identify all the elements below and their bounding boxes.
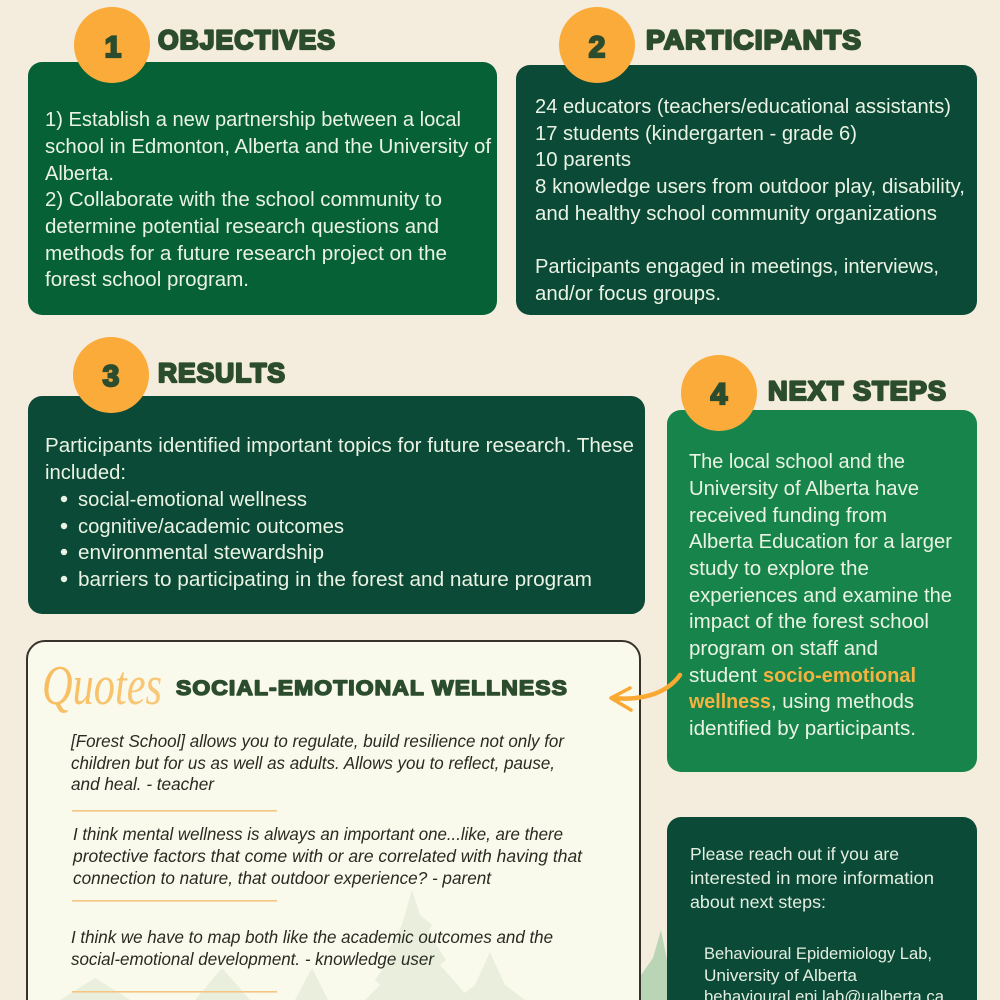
contact text: Behavioural Epidemiology Lab, [704,945,932,963]
results text: Participants identified important topics for future research. These [45,435,634,457]
quote: parent: protective factors that come with or are correlated with having that [72,846,583,866]
results text: environmental stewardship [78,542,324,564]
icon: tree beside quotes panel [641,930,667,1000]
icon: number 3 badge [73,337,149,413]
next steps text: University of Alberta have [689,478,919,500]
heading: next steps: NEXT STEPS [768,376,947,406]
icon: number 3 badge: 3 [103,360,119,393]
quote: parent: I think mental wellness is always an important one...like, are there [73,824,563,844]
heading: results: RESULTS [158,358,286,388]
objectives text: 1) Establish a new partnership between a local [45,109,461,131]
quote: knowledge user: social-emotional development. - knowledge user [71,949,435,969]
quote: parent: connection to nature, that outdoor experience? - parent [73,868,492,888]
panel: results [28,396,645,614]
quote: knowledge user [71,927,553,969]
quote: teacher [70,731,565,794]
results text: barriers to participating in the forest and nature program [78,569,592,591]
objectives text: methods for a future research project on the [45,243,447,265]
quote: knowledge user: I think we have to map both like the academic outcomes and the [71,927,553,947]
heading: objectives: OBJECTIVES [158,25,336,55]
next steps text: , using methods [771,691,914,713]
objectives text: determine potential research questions and [45,216,439,238]
objectives text: forest school program. [45,269,249,291]
contact text: interested in more information [690,868,934,888]
next steps text: The local school and the [689,451,905,473]
next steps text: socio-emotional [763,665,916,687]
participants text: Participants engaged in meetings, interviews, [535,256,939,278]
participants text: and healthy school community organizations [535,203,937,225]
panel: quotes [27,641,640,1000]
quote: teacher: [Forest School] allows you to regulate, build resilience not only for [70,731,565,751]
icon: number 1 badge: 1 [105,31,121,64]
icon: number 2 badge: 2 [589,31,605,64]
participants text: and/or focus groups. [535,283,721,305]
next steps text: student [689,665,757,687]
next steps text: study to explore the [689,558,869,580]
heading: social-emotional wellness: SOCIAL-EMOTIONAL WELLNESS [176,677,568,700]
contact text: Please reach out if you are [690,844,899,864]
contact text: University of Alberta [704,967,858,985]
participants text: 8 knowledge users from outdoor play, disability, [535,176,965,198]
arrow: next steps to quotes [611,675,680,710]
results text [45,435,634,591]
quote: teacher: and heal. - teacher [71,774,215,794]
heading: participants: PARTICIPANTS [646,25,862,55]
results text: cognitive/academic outcomes [78,516,344,538]
icon: number 4 badge: 4 [711,378,728,411]
objectives text: 2) Collaborate with the school community to [45,189,442,211]
panel: participants [516,65,977,315]
results text: included: [45,462,126,484]
participants text: 10 parents [535,149,631,171]
panel: next steps [667,410,977,772]
quotes script title: Quotes [42,655,162,717]
next steps text: impact of the forest school [689,611,929,633]
participants text [535,96,965,305]
icon: number 1 badge [74,7,150,83]
next steps text [688,451,952,740]
panel: objectives [28,62,497,315]
next steps text: identified by participants. [689,718,916,740]
results text: social-emotional wellness [78,489,307,511]
icon: number 2 badge [559,7,635,83]
next steps text: Alberta Education for a larger [689,531,952,553]
next steps text: wellness [688,691,771,713]
objectives text [45,109,491,291]
participants text: 24 educators (teachers/educational assistants) [535,96,951,118]
next steps text: program on staff and [689,638,878,660]
contact text: about next steps: [690,892,826,912]
next steps text: received funding from [689,505,887,527]
tree silhouettes [60,890,525,1000]
quote: parent [72,824,583,888]
contact text [690,844,945,1000]
next steps text: experiences and examine the [689,585,952,607]
objectives text: Alberta. [45,163,114,185]
quote: teacher: children but for us as well as adults. Allows you to reflect, pause, [71,753,555,773]
participants text: 17 students (kindergarten - grade 6) [535,123,857,145]
objectives text: school in Edmonton, Alberta and the University of [45,136,491,158]
icon: number 4 badge [681,355,757,431]
panel: contact [667,817,977,1000]
